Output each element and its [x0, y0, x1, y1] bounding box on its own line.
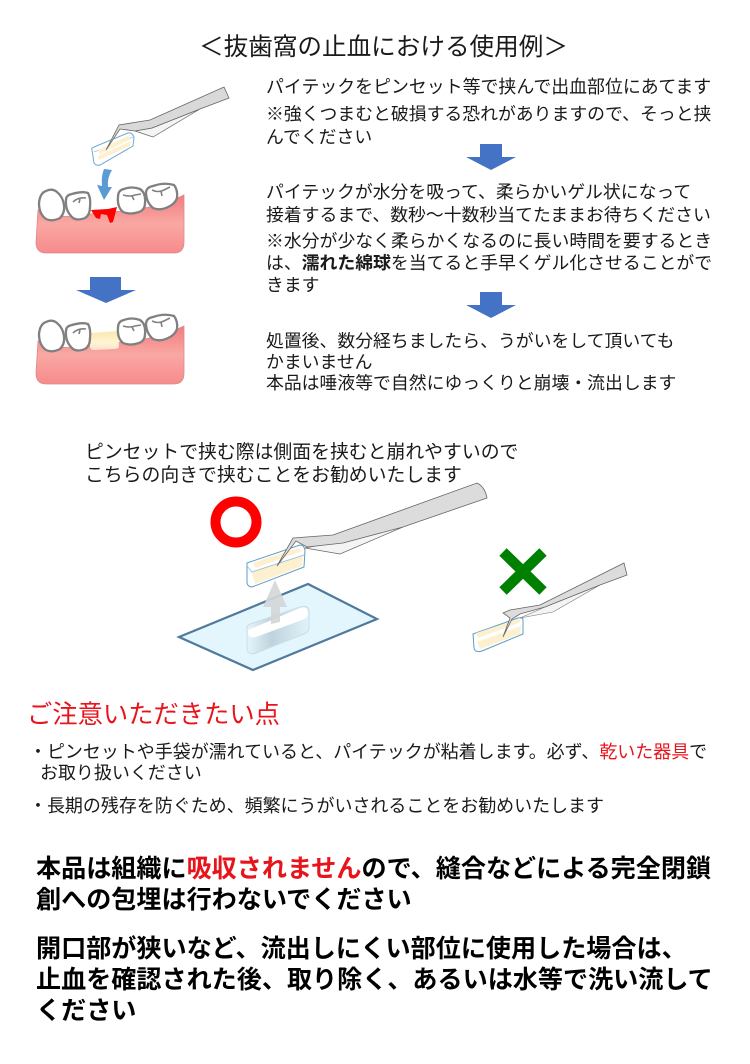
text block: precaution 2: ・長期の残存を防ぐため、頻繁にうがいされることをお勧めいたします — [29, 796, 604, 816]
text block: step 3: 処置後、数分経ちましたら、うがいをして頂いても — [266, 331, 674, 351]
warning: not absorbed: 本品は組織に吸収されませんので、縫合などによる完全閉鎖 — [36, 855, 711, 883]
text block: step 1 — [266, 77, 711, 147]
icon: red circle correct — [216, 502, 256, 542]
text block: step 2: 接着するまで、数秒～十数秒当てたままお待ちください — [266, 205, 711, 225]
title: ＜抜歯窩の止血における使用例＞ — [199, 34, 568, 61]
text block: step 2: ※水分が少なく柔らかくなるのに長い時間を要するとき — [266, 231, 712, 251]
text block: step 1: ※強くつまむと破損する恐れがありますので、そっと挟 — [266, 104, 711, 124]
icon: green cross incorrect — [503, 552, 543, 591]
illustration: tweezers holding gel above socket — [92, 87, 229, 165]
text block: step 2: パイテックが水分を吸って、柔らかいゲル状になって — [266, 182, 691, 202]
warning: narrow openings: 止血を確認された後、取り除く、あるいは水等で洗い流して — [36, 966, 713, 994]
warning: narrow openings: ください — [36, 997, 136, 1025]
icon: curved blue arrow — [97, 169, 112, 200]
warning: narrow openings: 開口部が狭いなど、流出しにくい部位に使用した場合は、 — [36, 935, 687, 963]
text block: step 3 — [266, 331, 676, 393]
text block: step 2 — [266, 182, 712, 295]
text block: step 3: 本品は唾液等で自然にゆっくりと崩壊・流出します — [266, 373, 676, 393]
illustration: gums with gel in socket — [36, 315, 184, 384]
text block: step 1: んでください — [266, 127, 372, 147]
warning: not absorbed — [36, 855, 711, 914]
text block: step 2: は、濡れた綿球を当てると手早くゲル化させることがで — [266, 253, 712, 273]
warning: not absorbed: 創への包埋は行わないでください — [36, 886, 412, 914]
text block: precaution 1: お取り扱いください — [40, 763, 202, 783]
text block: tweezers guidance — [85, 441, 518, 485]
text block: step 2: きます — [266, 275, 320, 295]
heading: precautions: ご注意いただきたい点 — [27, 701, 280, 729]
illustration: incorrect grip on gel — [473, 563, 627, 652]
text block: step 3: かまいません — [266, 352, 373, 372]
text block: step 1: パイテックをピンセット等で挟んで出血部位にあてます — [266, 77, 711, 97]
illustration: gel lifted from sterile sheet — [179, 483, 487, 670]
text block: tweezers guidance: こちらの向きで挟むことをお勧めいたします — [85, 464, 462, 485]
icon: down arrow step 2 — [466, 292, 516, 318]
icon: down arrow left — [76, 277, 136, 303]
text block: tweezers guidance: ピンセットで挟む際は側面を挟むと崩れやすいので — [85, 441, 518, 462]
text block: precaution 1 — [29, 742, 707, 783]
icon: down arrow step 1 — [466, 144, 516, 170]
warning: narrow openings — [36, 935, 713, 1025]
illustration: gums with bleeding socket — [36, 184, 184, 253]
text block: precaution 1: ・ピンセットや手袋が濡れていると、パイテックが粘着します。必ず、乾いた器具で — [29, 742, 707, 762]
